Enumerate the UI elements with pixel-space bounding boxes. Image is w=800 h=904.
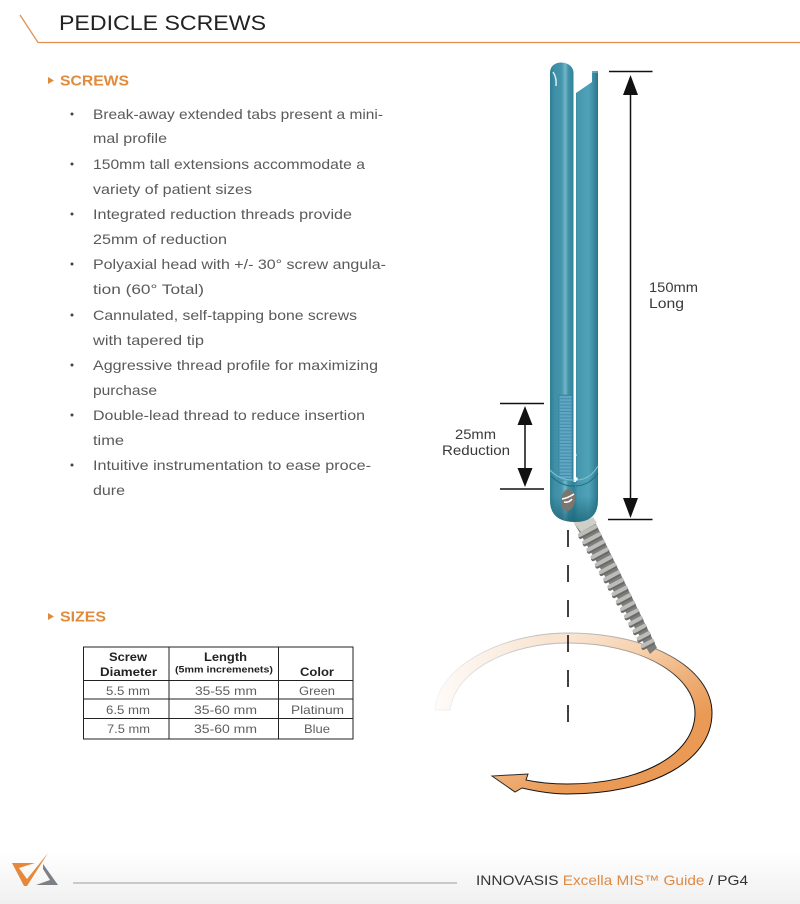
sizes table: Green (299, 684, 335, 698)
title text: PEDICLE SCREWS (59, 12, 266, 35)
tulip extension tube (550, 62, 598, 522)
footer text: INNOVASIS Excella MIS™ Guide / PG4 (476, 872, 748, 888)
screw hole (560, 488, 576, 512)
sizes table: Diameter (100, 665, 157, 679)
bullet list: dure (93, 482, 125, 498)
dimension: 150mm (608, 72, 698, 520)
footer rule (73, 882, 457, 884)
sizes table: (5mm incremenets) (175, 664, 273, 676)
bullet list: Aggressive thread profile for maximizing (93, 357, 378, 373)
bullet list (70, 106, 386, 498)
sizes table: Length (204, 650, 247, 664)
footer background (0, 850, 800, 904)
section: sizes (48, 608, 353, 739)
dimension: 150mm: Long (649, 295, 684, 311)
sizes table: 35-60 mm (194, 703, 257, 717)
title (20, 12, 800, 42)
sizes table (83, 647, 353, 739)
label: 25mm (455, 426, 496, 442)
reduction threads (559, 395, 572, 480)
section: screws (48, 72, 386, 498)
sizes table: Color (300, 665, 334, 679)
bullet list: Double-lead thread to reduce insertion (93, 407, 365, 423)
bullet list: Cannulated, self-tapping bone screws (93, 307, 357, 323)
bullet list: tion (60° Total) (93, 281, 204, 297)
sizes table: 7.5 mm (107, 722, 150, 736)
logo (12, 853, 58, 886)
bullet list: 25mm of reduction (93, 231, 227, 247)
bullet list: time (93, 432, 124, 448)
collar (550, 466, 598, 480)
white slit (574, 72, 576, 482)
sizes table: Platinum (291, 703, 344, 717)
section heading: sizes: SIZES (60, 608, 106, 626)
bullet list: Break-away extended tabs present a mini- (93, 106, 383, 122)
label: 150mm (649, 279, 698, 295)
title rule (20, 15, 800, 42)
sizes table: 35-55 mm (195, 684, 257, 698)
bullet list: Integrated reduction threads provide (93, 206, 352, 222)
dashed axis line (567, 530, 569, 723)
sizes table: 5.5 mm (106, 684, 150, 698)
bullet list: mal profile (93, 130, 167, 146)
sizes table: Blue (304, 722, 330, 736)
dimension: 25mm reduction (442, 404, 544, 489)
bullet list: 150mm tall extensions accommodate a (93, 156, 365, 172)
section heading: screws: SCREWS (60, 72, 129, 90)
bullet list: with tapered tip (92, 332, 204, 348)
sizes table: 35-60 mm (194, 722, 257, 736)
bullet list: Polyaxial head with +/- 30° screw angula- (93, 256, 386, 272)
screw shank (573, 517, 657, 654)
footer (12, 853, 748, 888)
sizes table: Screw (109, 650, 148, 664)
sizes table: 6.5 mm (106, 703, 150, 717)
bottom shade (550, 496, 598, 522)
bullet list: Intuitive instrumentation to ease proce- (93, 457, 371, 473)
rotation ring arrow (428, 628, 712, 794)
bullet list: purchase (93, 382, 157, 398)
bullet list: variety of patient sizes (93, 181, 252, 197)
dimension: 25mm reduction: Reduction (442, 442, 510, 458)
